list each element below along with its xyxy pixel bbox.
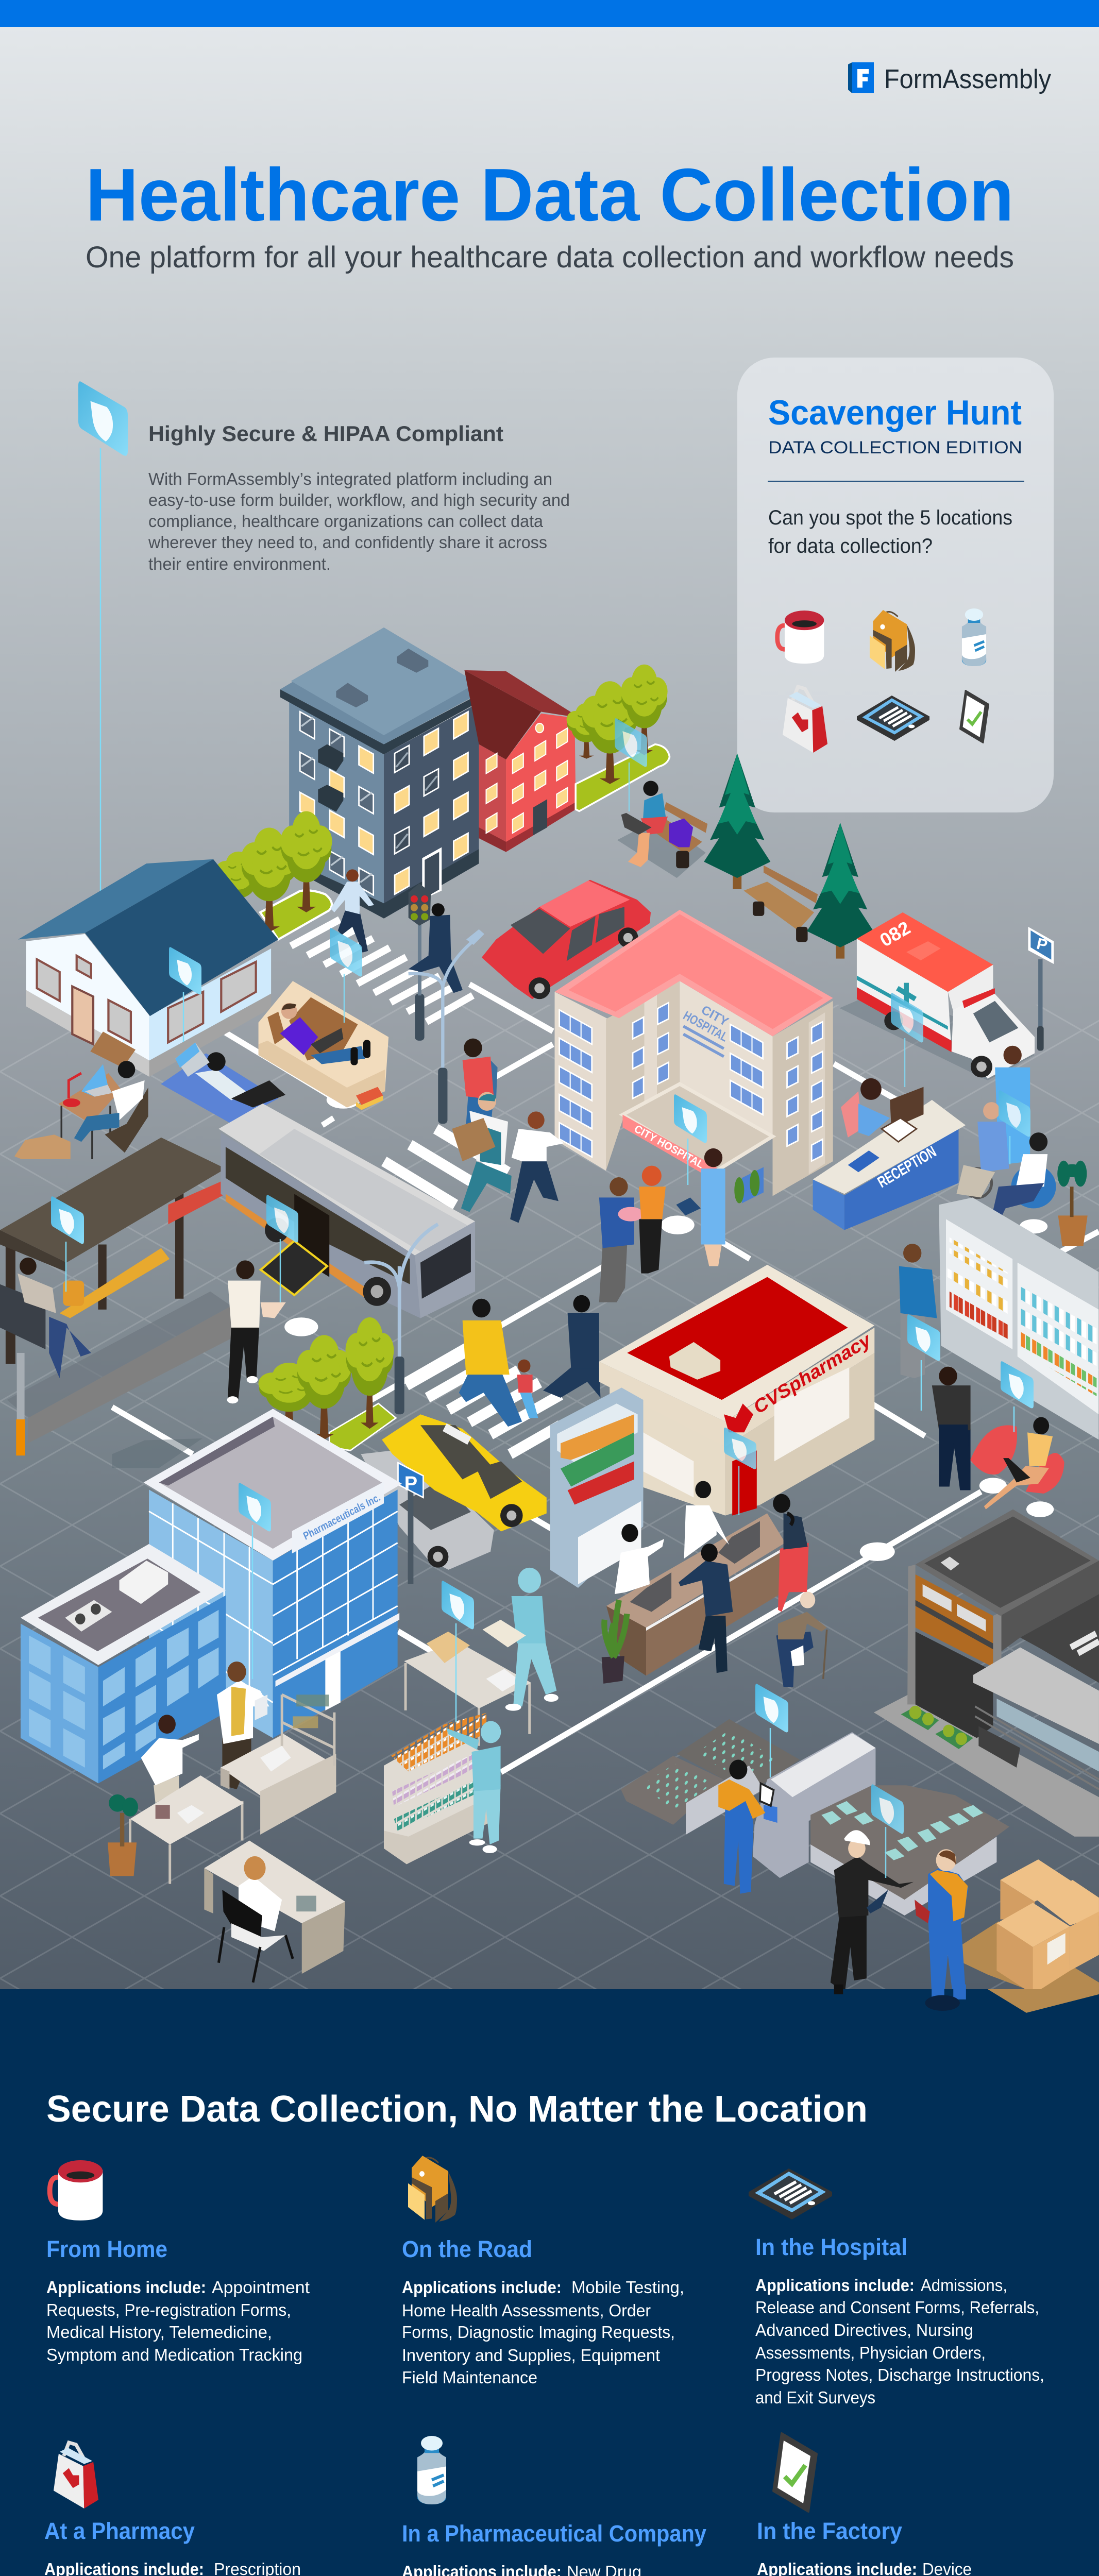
potted palm — [108, 1794, 138, 1876]
person: paramedic — [995, 1046, 1030, 1165]
building: city hospital: CITY HOSPITAL — [632, 1123, 706, 1171]
icon: backpack — [408, 2156, 457, 2223]
person: man in navy walking — [543, 1295, 601, 1398]
person: man in suit walking — [409, 903, 463, 993]
applications text — [44, 2560, 320, 2576]
marker: hospital — [674, 1094, 707, 1185]
person: woman waiting at bus stop — [18, 1258, 91, 1378]
text block: platform description: their entire environment. — [148, 554, 331, 573]
location: from home — [46, 2160, 310, 2364]
marker: bus — [266, 1195, 298, 1302]
applications text: Progress Notes, Discharge Instructions, — [755, 2365, 1044, 2384]
family group — [599, 1166, 666, 1302]
building: apartment block — [280, 628, 487, 919]
person: customer in navy suit — [679, 1544, 733, 1673]
text block: platform description: With FormAssembly’s integrated platform including an — [148, 469, 552, 488]
subtitle: One platform for all your healthcare data collection and workflow needs — [86, 241, 1014, 274]
planting strip with trees — [567, 665, 670, 811]
parking sign: P — [1035, 935, 1049, 954]
park bench — [743, 866, 818, 942]
pallet of boxes — [946, 1859, 1099, 1994]
desk with man on laptop — [59, 1061, 148, 1159]
applications text — [46, 2278, 310, 2364]
conveyor left — [621, 1719, 800, 1835]
wooden bench by house — [90, 1031, 136, 1067]
person: factory worker with clipboard — [915, 1849, 969, 2000]
bedroom rug with woman on laptop — [161, 1042, 285, 1124]
building: CVS pharmacy: CVSpharmacy — [750, 1328, 875, 1418]
person: supervisor with hard hat — [831, 1830, 914, 1992]
marker: reception waiting — [999, 1090, 1030, 1164]
heading: at a pharmacy: At a Pharmacy — [44, 2518, 195, 2544]
person: woman walking on crosswalk — [331, 869, 374, 953]
pharmacy counter — [606, 1513, 796, 1676]
top bar — [0, 0, 1099, 27]
icon: phone — [960, 690, 989, 743]
bench with woman on laptop — [617, 781, 707, 878]
medicine shelving — [384, 1713, 497, 1864]
marker: lab table — [442, 1581, 474, 1722]
icon: shopping bag — [54, 2443, 98, 2509]
crosswalk — [291, 920, 473, 1022]
marker: store lounge — [1001, 1361, 1034, 1432]
icon: shopping bag — [783, 687, 827, 753]
applications text: Release and Consent Forms, Referrals, — [755, 2298, 1039, 2317]
person: seated woman with blue chair — [989, 1132, 1056, 1233]
red car — [482, 880, 651, 999]
bus stop shelter — [0, 1138, 231, 1455]
person: man with clipboard — [227, 1260, 286, 1403]
person: factory worker with tablet — [718, 1760, 774, 1894]
applications text: Applications include: — [402, 2278, 562, 2297]
question text: for data collection? — [768, 535, 933, 557]
heading: scavenger hunt: Scavenger Hunt — [768, 393, 1022, 432]
road markings — [112, 984, 1098, 1772]
building: blue roof house — [18, 859, 278, 1077]
heading: in the hospital: In the Hospital — [755, 2234, 907, 2260]
panel: scavenger hunt — [737, 358, 1054, 812]
panel: secure data collection — [0, 1985, 1099, 2576]
planting strip with trees — [215, 811, 332, 939]
subheading: data collection edition: DATA COLLECTION EDITION — [768, 438, 1022, 457]
applications text: Field Maintenance — [402, 2368, 537, 2387]
display shelving unit — [939, 1197, 1098, 1439]
person: woman in red trousers — [773, 1494, 809, 1612]
logo: FormAssembly: FormAssembly — [884, 64, 1051, 94]
applications text — [402, 2562, 706, 2576]
lower-left: pharmaceutical company — [21, 1409, 559, 1982]
pine tree — [704, 753, 770, 889]
lower-right: pharmacy counter and factory — [602, 1417, 1099, 2000]
couch with reclining man — [259, 981, 388, 1110]
applications text: Medical History, Telemedicine, — [46, 2323, 272, 2342]
marker: couch — [330, 928, 362, 1023]
location: in the factory — [757, 2433, 1041, 2576]
microscope desk with seated scientist — [204, 1840, 345, 1982]
pharmacy display shelf — [550, 1387, 643, 1588]
building: pharmaceuticals low block — [21, 1544, 226, 1783]
icon: tablet — [857, 696, 929, 741]
parking sign: P — [404, 1472, 417, 1495]
lab bench with microscope station — [221, 1694, 336, 1835]
marker: store shelf — [907, 1314, 940, 1411]
reception desk — [813, 1087, 966, 1230]
street lamp near bus — [364, 1224, 438, 1414]
icon: tablet — [749, 2168, 832, 2219]
marker: bus stop — [51, 1196, 84, 1292]
person: worker in scrubs at shelf — [446, 1721, 501, 1853]
applications text: Admissions, — [921, 2276, 1007, 2295]
icon: backpack — [870, 610, 915, 672]
applications text: Advanced Directives, Nursing — [755, 2320, 973, 2340]
applications text — [755, 2276, 1044, 2407]
yellow taxi — [382, 1414, 547, 1532]
ambulance — [839, 912, 1035, 1080]
conveyor right — [810, 1785, 1009, 1916]
applications text: Applications include: — [46, 2278, 206, 2297]
person: man near red chairs — [939, 1425, 970, 1489]
reception desk: RECEPTION — [875, 1143, 939, 1191]
applications text: Forms, Diagnostic Imaging Requests, — [402, 2323, 675, 2342]
street lamp — [409, 929, 484, 1124]
applications text — [757, 2560, 1041, 2576]
heading: in the factory: In the Factory — [757, 2518, 902, 2544]
heading: from home: From Home — [46, 2236, 167, 2262]
heading: secure data collection: Secure Data Collection, No Matter the Location — [46, 2089, 868, 2130]
person: man in white shirt — [510, 1111, 564, 1223]
person: scientist man in lab coat — [217, 1662, 269, 1789]
lounge chairs with woman on laptop — [970, 1417, 1064, 1517]
marker: ambulance — [891, 993, 923, 1087]
location: in a pharmaceutical company — [402, 2436, 706, 2576]
central street scene — [0, 1039, 1098, 1490]
pine tree — [807, 823, 873, 959]
lab table with scale — [404, 1632, 531, 1746]
icon: bottle — [417, 2436, 446, 2504]
location: in the hospital — [749, 2168, 1044, 2407]
building: city hospital: CITY — [699, 1003, 731, 1029]
building: pharmaceuticals inc tower: Pharmaceuticals Inc. — [301, 1491, 382, 1543]
location: on the road — [402, 2156, 684, 2387]
building: city hospital: HOSPITAL — [681, 1009, 730, 1045]
applications text: Symptom and Medication Tracking — [46, 2345, 302, 2364]
person: man in yellow sweater with child — [459, 1299, 538, 1427]
ground tile grid — [0, 1005, 1099, 1990]
bus — [218, 1104, 475, 1318]
question text — [768, 506, 1012, 557]
building: pharmaceuticals inc tower — [143, 1409, 402, 1738]
parking sign — [1028, 927, 1054, 1051]
upper-right street — [482, 665, 1054, 1204]
person: female pharmacist — [615, 1524, 664, 1594]
person: man in blue at shelf — [899, 1244, 937, 1378]
traffic light — [409, 884, 431, 1041]
person: receptionist — [841, 1078, 890, 1138]
building: factory — [874, 1510, 1099, 1837]
planting strip with trees — [259, 1317, 396, 1450]
text block: platform description: easy-to-use form builder, workflow, and high security and — [148, 490, 570, 510]
applications text: and Exit Surveys — [755, 2388, 875, 2407]
applications text: Requests, Pre-registration Forms, — [46, 2300, 291, 2319]
text block: platform description: compliance, healthcare organizations can collect data — [148, 512, 544, 531]
applications text: Applications include: — [755, 2276, 915, 2295]
applications text — [402, 2278, 684, 2387]
ambulance: 082 — [876, 917, 914, 951]
potted palm — [1057, 1161, 1088, 1246]
marker: pharmacy — [724, 1428, 756, 1515]
icon: mug — [50, 2160, 103, 2221]
marker: conveyor two — [871, 1784, 904, 1878]
marker: conveyor — [755, 1684, 788, 1777]
data collection shield markers — [51, 718, 1034, 1878]
applications text: Assessments, Physician Orders, — [755, 2343, 986, 2362]
person: delivery man with box — [452, 1092, 512, 1212]
icon: phone — [773, 2433, 817, 2512]
person: doctor with tablet — [676, 1148, 725, 1266]
location: at a pharmacy — [44, 2443, 320, 2576]
potted plant — [602, 1600, 627, 1684]
small potted plants — [734, 1170, 759, 1204]
person: worker in scrubs with tray — [483, 1568, 559, 1711]
person: man in red shirt — [463, 1039, 498, 1129]
scene background gradient — [0, 27, 1099, 1990]
street post base — [112, 1438, 202, 1468]
applications text: Mobile Testing, — [571, 2278, 684, 2297]
heading: on the road: On the Road — [402, 2236, 532, 2262]
text block: platform description — [148, 469, 570, 573]
heading: in a pharmaceutical company: In a Pharmaceutical Company — [402, 2520, 706, 2547]
dog — [14, 1134, 71, 1159]
building: city hospital — [554, 910, 833, 1204]
marker: pharmaceuticals — [239, 1483, 271, 1679]
grey and yellow cars — [361, 1265, 875, 1588]
icon: bottle — [962, 608, 986, 666]
boxes and feet overlapping navy — [834, 1985, 1099, 2013]
person: man using phone — [932, 1367, 971, 1490]
text block: platform description: wherever they need to, and confidently share it across — [148, 533, 547, 552]
heading: highly secure: Highly Secure & HIPAA Compliant — [148, 421, 503, 446]
building: red townhouse — [464, 670, 580, 852]
upper-left neighbourhood — [14, 628, 580, 1159]
building: CVS pharmacy — [599, 1265, 875, 1516]
person: elderly man with cane — [776, 1592, 827, 1687]
applications text: Inventory and Supplies, Equipment — [402, 2346, 660, 2365]
icon: security shield with pole — [78, 381, 128, 1002]
inspection machine — [753, 1732, 875, 1878]
applications text: Home Health Assessments, Order — [402, 2301, 651, 2320]
person: scientist woman in lab coat — [141, 1715, 199, 1803]
marker: home — [169, 947, 201, 1042]
lab table — [130, 1775, 244, 1884]
marker: bench — [615, 718, 647, 811]
person: male pharmacist — [684, 1481, 729, 1558]
parking sign — [398, 1463, 423, 1584]
person: patient in wheelchair — [956, 1102, 1009, 1197]
question text: Can you spot the 5 locations — [768, 506, 1012, 529]
title: Healthcare Data Collection — [86, 153, 1014, 236]
applications text: Appointment — [212, 2278, 310, 2297]
icon: mug — [777, 611, 824, 664]
grey car — [361, 1450, 494, 1570]
